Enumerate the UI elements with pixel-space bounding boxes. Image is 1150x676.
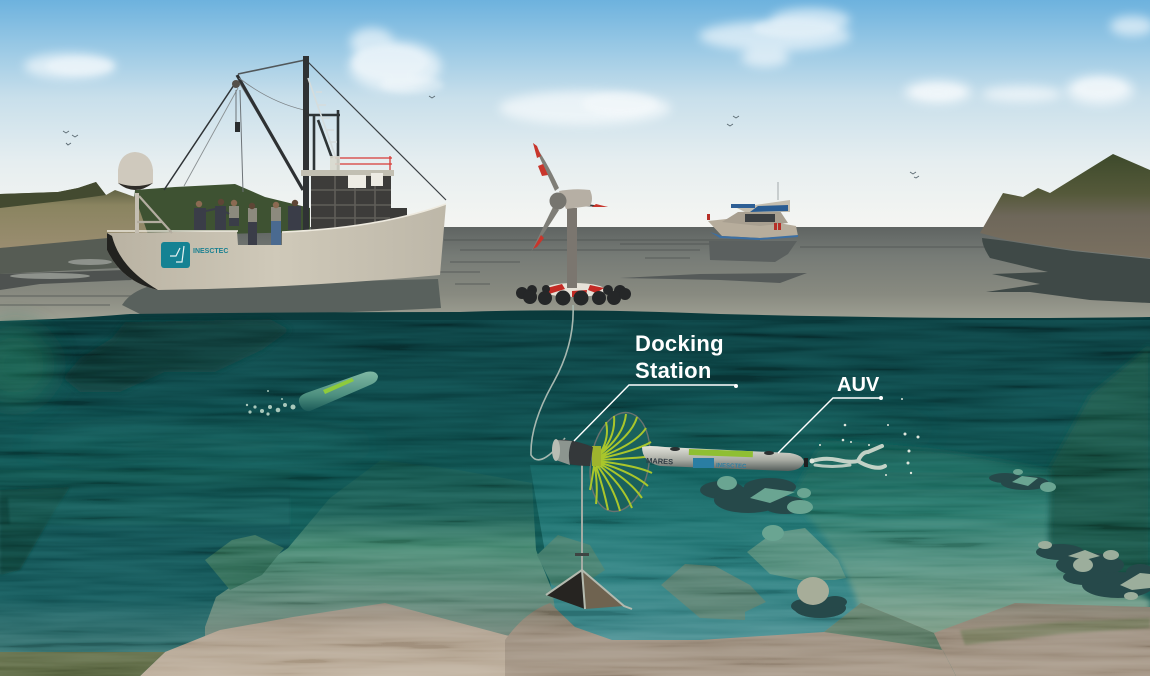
- left dark bank: [0, 470, 290, 652]
- right slope: [790, 440, 1150, 650]
- callout: Docking Station: Docking: [635, 331, 724, 356]
- foreground olive: [0, 652, 165, 676]
- birds: [63, 96, 919, 178]
- funnel cone: [583, 408, 657, 516]
- ship underwater shadow: [63, 319, 290, 392]
- cable: [531, 305, 573, 460]
- land: right cliff: [980, 154, 1150, 303]
- mast: [303, 56, 309, 232]
- crew: [194, 199, 301, 245]
- left ridge: [205, 460, 560, 652]
- upper glows: [30, 408, 930, 463]
- docking cylinder: [556, 440, 593, 466]
- seabed: [0, 440, 1150, 676]
- wind turbine on buoy: [516, 143, 631, 306]
- ship reflection: [122, 279, 441, 314]
- buoy ring: [516, 283, 631, 306]
- land: left hills: [0, 182, 310, 290]
- sea surface: [0, 227, 1150, 323]
- research ship: [107, 56, 446, 314]
- rock piles: [700, 469, 1150, 618]
- clouds: [24, 8, 1150, 125]
- foreground sand left: [140, 603, 520, 676]
- AUV distant: [246, 372, 378, 416]
- callout: AUV: [778, 374, 883, 453]
- AUV main: INESCTEC: [716, 463, 747, 470]
- docking station: [546, 408, 657, 609]
- pyramid base: [546, 570, 585, 609]
- callout: Docking Station: [574, 331, 738, 441]
- water and sand ripple texture: [0, 320, 1150, 676]
- AUV main: [642, 398, 920, 476]
- sky: [0, 0, 1150, 232]
- yacht: [620, 182, 807, 283]
- wheelhouse: [311, 175, 391, 231]
- AUV main: MARES: [646, 456, 673, 466]
- bubbles: [812, 446, 885, 468]
- research ship: INESCTEC: [193, 248, 228, 255]
- mounds: [661, 564, 766, 620]
- central clearing: [530, 465, 880, 640]
- underwater section: [0, 310, 1150, 676]
- centre peak: [505, 603, 956, 676]
- rigging: [164, 60, 446, 200]
- boulder: [797, 577, 829, 605]
- support pole: [581, 465, 583, 572]
- logo: [161, 242, 190, 268]
- left green glow: [0, 325, 55, 405]
- dome: [135, 193, 139, 233]
- small hill: [205, 535, 284, 590]
- callout: Docking Station: Station: [635, 358, 712, 383]
- callout: AUV: AUV: [837, 374, 880, 396]
- right wall: [1048, 345, 1150, 590]
- hull: [107, 204, 446, 290]
